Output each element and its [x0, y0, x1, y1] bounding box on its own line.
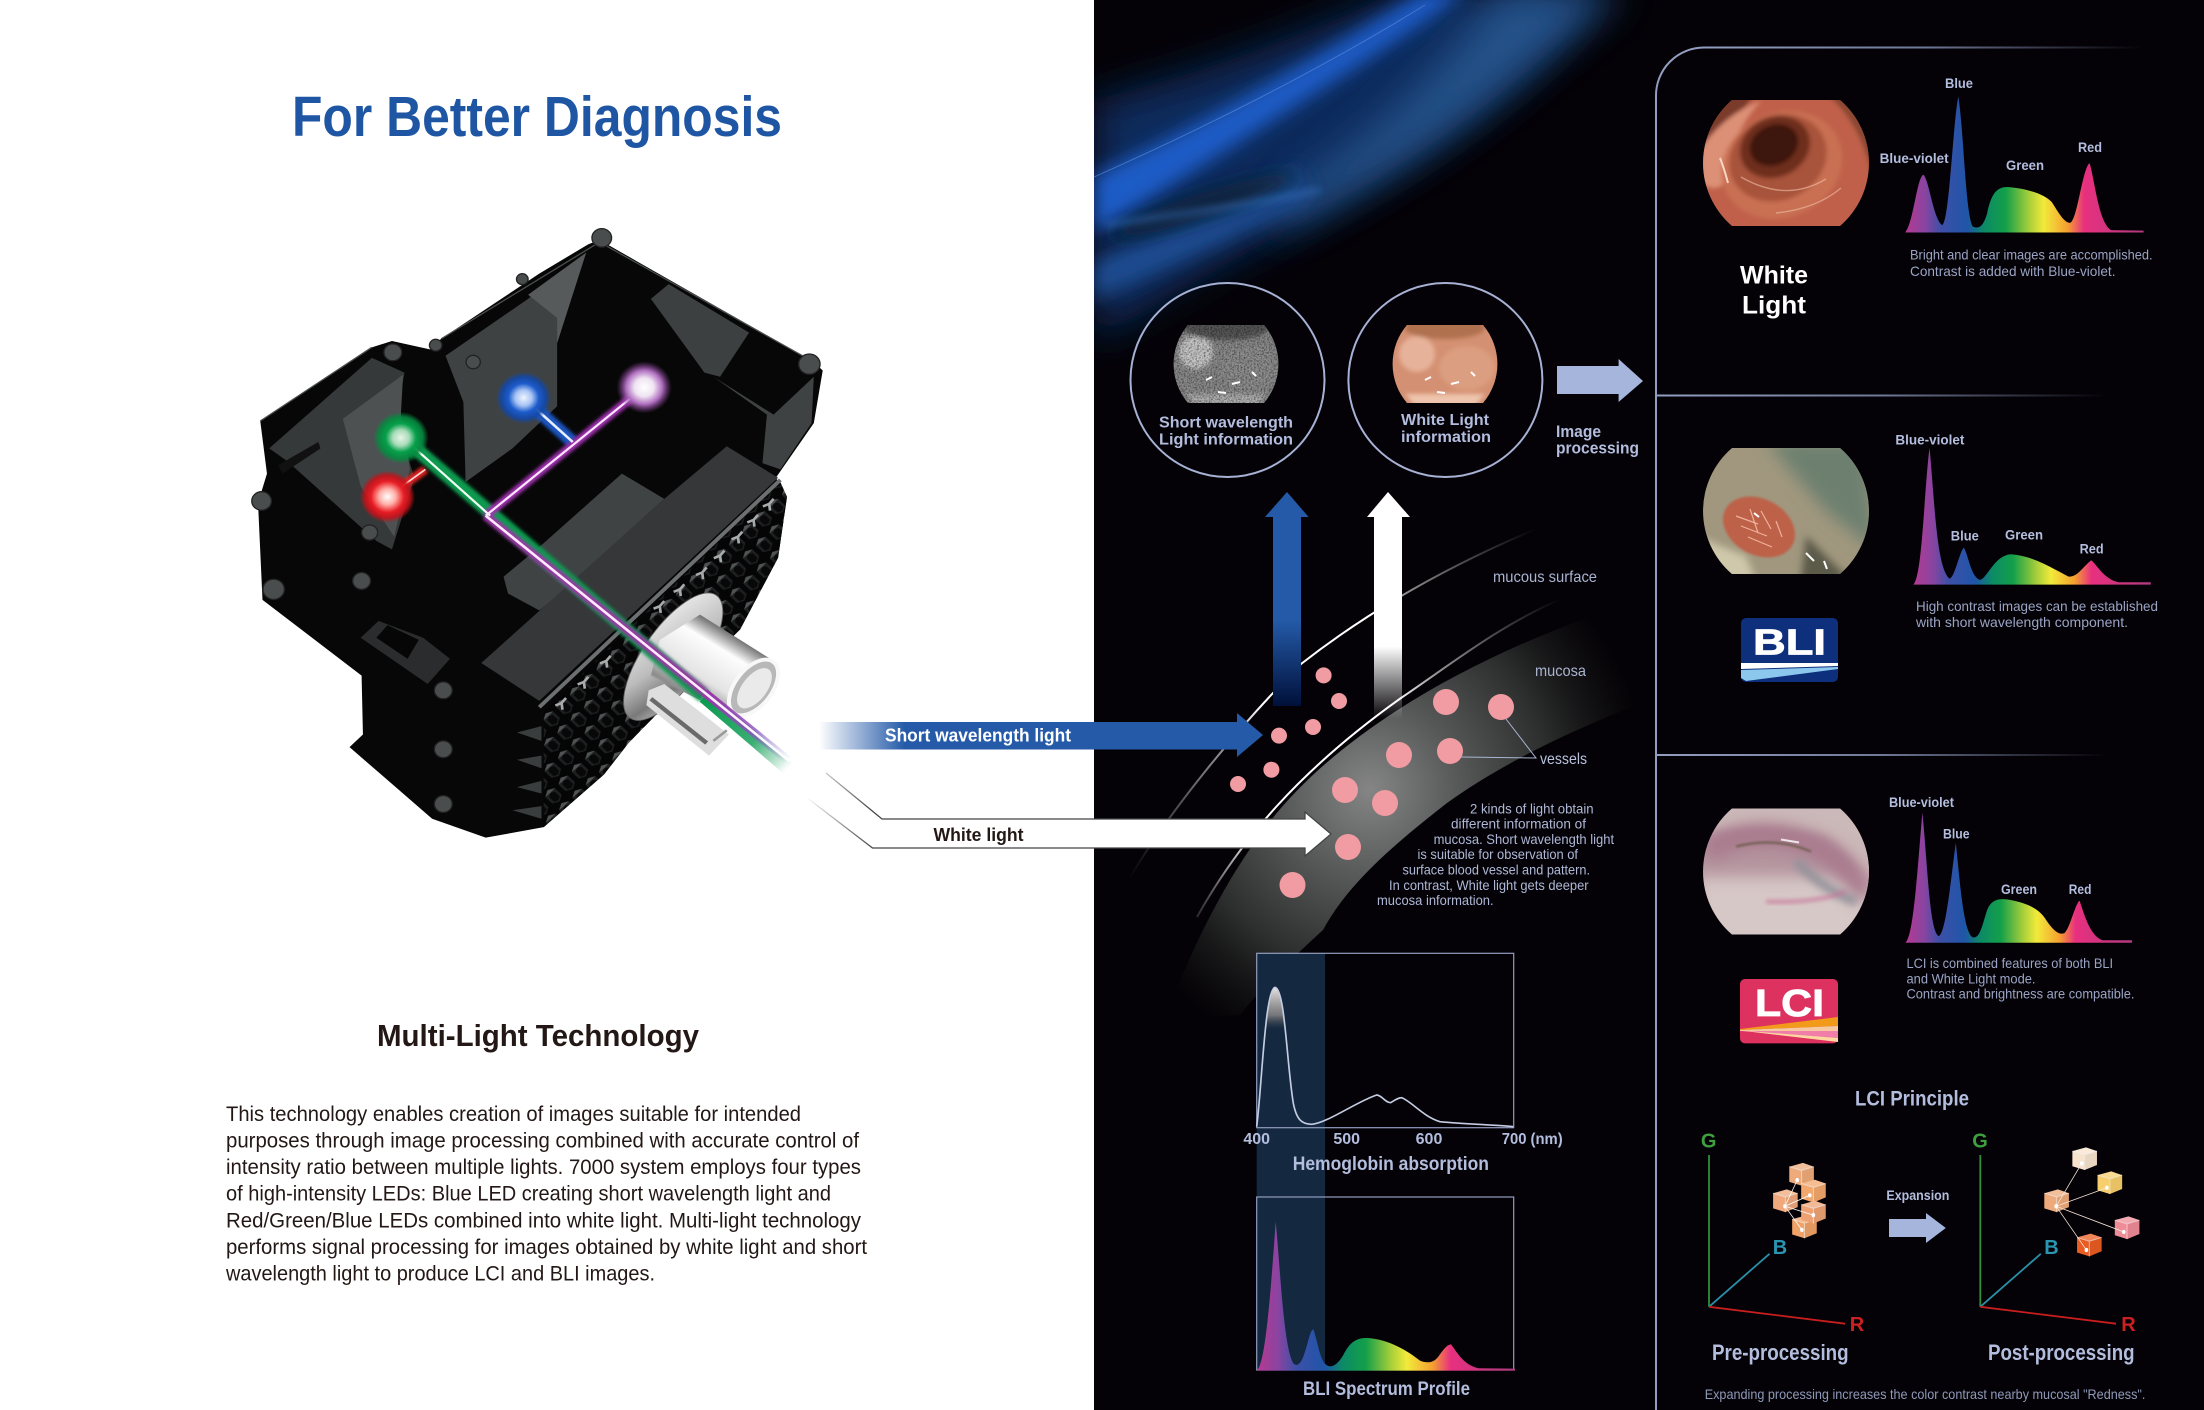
description — [1906, 955, 2134, 1002]
explanation text: In contrast, White light gets deeper — [1389, 877, 1589, 893]
explanation text: 2 kinds of light obtain — [1470, 800, 1594, 816]
mucosa layer diagram — [1129, 529, 1650, 1020]
white background panel — [0, 0, 1094, 1410]
spectrum labels: Green — [2001, 881, 2037, 897]
white light information circle: information — [1401, 429, 1491, 446]
heading: Multi-Light Technology: Multi-Light Technology — [377, 1018, 700, 1053]
diagram: pre-processing colour space: B — [1773, 1237, 1787, 1259]
body text: This technology enables creation of images suitable for intended — [226, 1103, 801, 1126]
description: with short wavelength component. — [1915, 614, 2128, 630]
diagram: pre-processing colour space: R — [1850, 1314, 1865, 1336]
short wavelength information circle — [1130, 283, 1324, 477]
description — [1915, 598, 2158, 630]
label: white light information: White Light — [1401, 412, 1490, 429]
diagram: post-processing colour space: G — [1972, 1131, 1988, 1153]
label: mucous surface: mucous surface — [1493, 569, 1597, 586]
axis labels: 500 — [1333, 1131, 1360, 1148]
spectrum labels — [1889, 794, 2091, 897]
diagram: pre-processing colour space: G — [1701, 1131, 1716, 1153]
spectrum labels: Blue — [1951, 528, 1979, 544]
BLI logo — [1741, 618, 1838, 682]
panel: BLI — [1696, 432, 2158, 682]
blue light streak background — [1094, 0, 1625, 340]
expansion arrow — [1886, 1187, 1949, 1243]
spectrum labels — [1895, 432, 2104, 556]
diagram: post-processing colour space: B — [2044, 1237, 2059, 1259]
LCI logo: LCI — [1755, 983, 1824, 1025]
label: pre-processing: Pre-processing — [1712, 1340, 1849, 1365]
chart: BLI spectrum profile — [1257, 1197, 1515, 1400]
vessels callout — [1461, 719, 1587, 768]
heading: LCI Principle: LCI Principle — [1855, 1088, 1969, 1111]
body text: Red/Green/Blue LEDs combined into white light. Multi-light technology — [226, 1209, 861, 1232]
endoscope image: LCI — [1703, 808, 1869, 934]
explanation text — [1377, 800, 1614, 908]
label: White Light: White — [1740, 261, 1808, 289]
caption: expanding processing: Expanding processing increases the color contrast nearby mucosal "Redness". — [1705, 1386, 2145, 1402]
spectrum labels: Blue-violet — [1895, 432, 1965, 448]
label: mucosa: mucosa — [1535, 663, 1586, 680]
image processing arrow — [1557, 359, 1643, 402]
label: white light: White light — [934, 825, 1024, 845]
white light arrow — [806, 773, 1331, 856]
explanation text: mucosa. Short wavelength light — [1434, 831, 1614, 847]
label: short wavelength light information: Short wavelength — [1159, 414, 1293, 432]
axes — [1980, 1155, 2116, 1324]
short wavelength light arrow — [819, 713, 1263, 757]
mucosa boundary line — [1197, 599, 1561, 917]
chart caption: Hemoglobin absorption — [1293, 1154, 1489, 1175]
panel: White Light — [1696, 75, 2153, 320]
spectrum labels: Green — [2005, 527, 2043, 543]
body text: intensity ratio between multiple lights. 7000 system employs four types — [226, 1156, 861, 1179]
endoscope image: white light — [1703, 100, 1869, 226]
body text: performs signal processing for images obtained by white light and short — [226, 1236, 867, 1259]
body text — [225, 1103, 867, 1286]
colour endoscope image — [1392, 325, 1498, 403]
diagram: post-processing colour space — [1972, 1131, 2139, 1365]
violet LED glow — [616, 361, 672, 413]
spectrum labels: Green — [2006, 157, 2044, 173]
spectrum chart: BLI — [1913, 448, 2151, 585]
explanation text: different information of — [1451, 816, 1586, 832]
body text: purposes through image processing combined with accurate control of — [226, 1130, 859, 1152]
blue up arrow — [1265, 492, 1309, 706]
vessels callout: vessels — [1540, 751, 1587, 768]
clustered colour cubes — [1773, 1163, 1826, 1238]
label: image processing — [1556, 422, 1639, 458]
metal light output port — [605, 579, 788, 756]
diagram: pre-processing colour space — [1701, 1131, 1865, 1365]
spectrum labels — [1880, 75, 2102, 173]
axes — [1709, 1155, 1845, 1324]
explanation text: surface blood vessel and pattern. — [1402, 862, 1590, 878]
mucous surface line — [1129, 529, 1536, 879]
chart caption: BLI Spectrum Profile — [1303, 1379, 1470, 1400]
spectrum labels: Blue-violet — [1889, 794, 1954, 810]
spectrum labels: Red — [2069, 881, 2091, 897]
dark background panel — [1094, 0, 2204, 1410]
spectrum labels: Blue — [1945, 75, 1973, 91]
highlighted short wavelength band — [1257, 953, 1325, 1370]
axis labels: 700 (nm) — [1502, 1131, 1563, 1148]
beams of LED light — [387, 387, 789, 769]
explanation text: mucosa information. — [1377, 892, 1494, 908]
panel: White Light: Light — [1742, 292, 1807, 320]
axis labels — [1243, 1131, 1563, 1148]
heatsink fins — [512, 480, 787, 827]
white up arrow — [1367, 492, 1410, 719]
spectrum labels: Blue-violet — [1880, 150, 1949, 166]
label: image processing: Image — [1556, 422, 1601, 441]
beam fade to white — [771, 751, 852, 823]
description — [1910, 247, 2153, 279]
body text: of high-intensity LEDs: Blue LED creating short wavelength light and — [226, 1183, 831, 1206]
explanation text: is suitable for observation of — [1418, 846, 1578, 862]
expanded colour cubes — [2044, 1147, 2139, 1256]
LCI logo — [1740, 979, 1838, 1043]
vessel dots — [1230, 667, 1514, 898]
right column frame — [1656, 46, 2143, 1410]
white light information circle — [1348, 283, 1542, 477]
green LED glow — [373, 412, 429, 464]
grayscale endoscope image — [1174, 325, 1278, 403]
expansion arrow: Expansion — [1886, 1187, 1949, 1203]
description: Contrast and brightness are compatible. — [1906, 986, 2134, 1002]
description: High contrast images can be established — [1916, 598, 2158, 614]
spectrum labels: Blue — [1943, 825, 1970, 841]
chart: hemoglobin absorption — [1243, 953, 1563, 1175]
description: and White Light mode. — [1906, 971, 2036, 987]
diagram: post-processing colour space: R — [2121, 1314, 2136, 1336]
label: post-processing: Post-processing — [1988, 1340, 2135, 1365]
label: image processing: processing — [1556, 439, 1639, 458]
endoscope image: BLI — [1703, 448, 1869, 574]
spectrum chart: LCI — [1905, 812, 2132, 943]
body text: wavelength light to produce LCI and BLI images. — [225, 1263, 655, 1286]
BLI logo: BLI — [1753, 621, 1826, 662]
axis labels: 400 — [1243, 1131, 1270, 1148]
mucosa band — [1165, 600, 1650, 1020]
description: Contrast is added with Blue-violet. — [1910, 263, 2116, 279]
blue LED glow — [496, 372, 551, 424]
title: For Better Diagnosis — [292, 85, 782, 149]
red LED glow — [360, 471, 415, 523]
housing interior walls — [260, 242, 814, 701]
description: LCI is combined features of both BLI — [1906, 955, 2113, 971]
short wavelength information circle: Light information — [1159, 432, 1293, 448]
panel: LCI — [1696, 794, 2134, 1043]
label: short wavelength light: Short wavelength light — [885, 726, 1071, 746]
spectrum labels: Red — [2078, 139, 2102, 155]
axis labels: 600 — [1416, 1131, 1442, 1148]
mounting bolts — [252, 229, 820, 812]
spectrum labels: Red — [2080, 540, 2104, 556]
housing body — [258, 240, 823, 838]
description: Bright and clear images are accomplished. — [1910, 247, 2153, 263]
spectrum chart: white light — [1905, 97, 2144, 232]
LED light source housing illustration — [252, 229, 852, 838]
